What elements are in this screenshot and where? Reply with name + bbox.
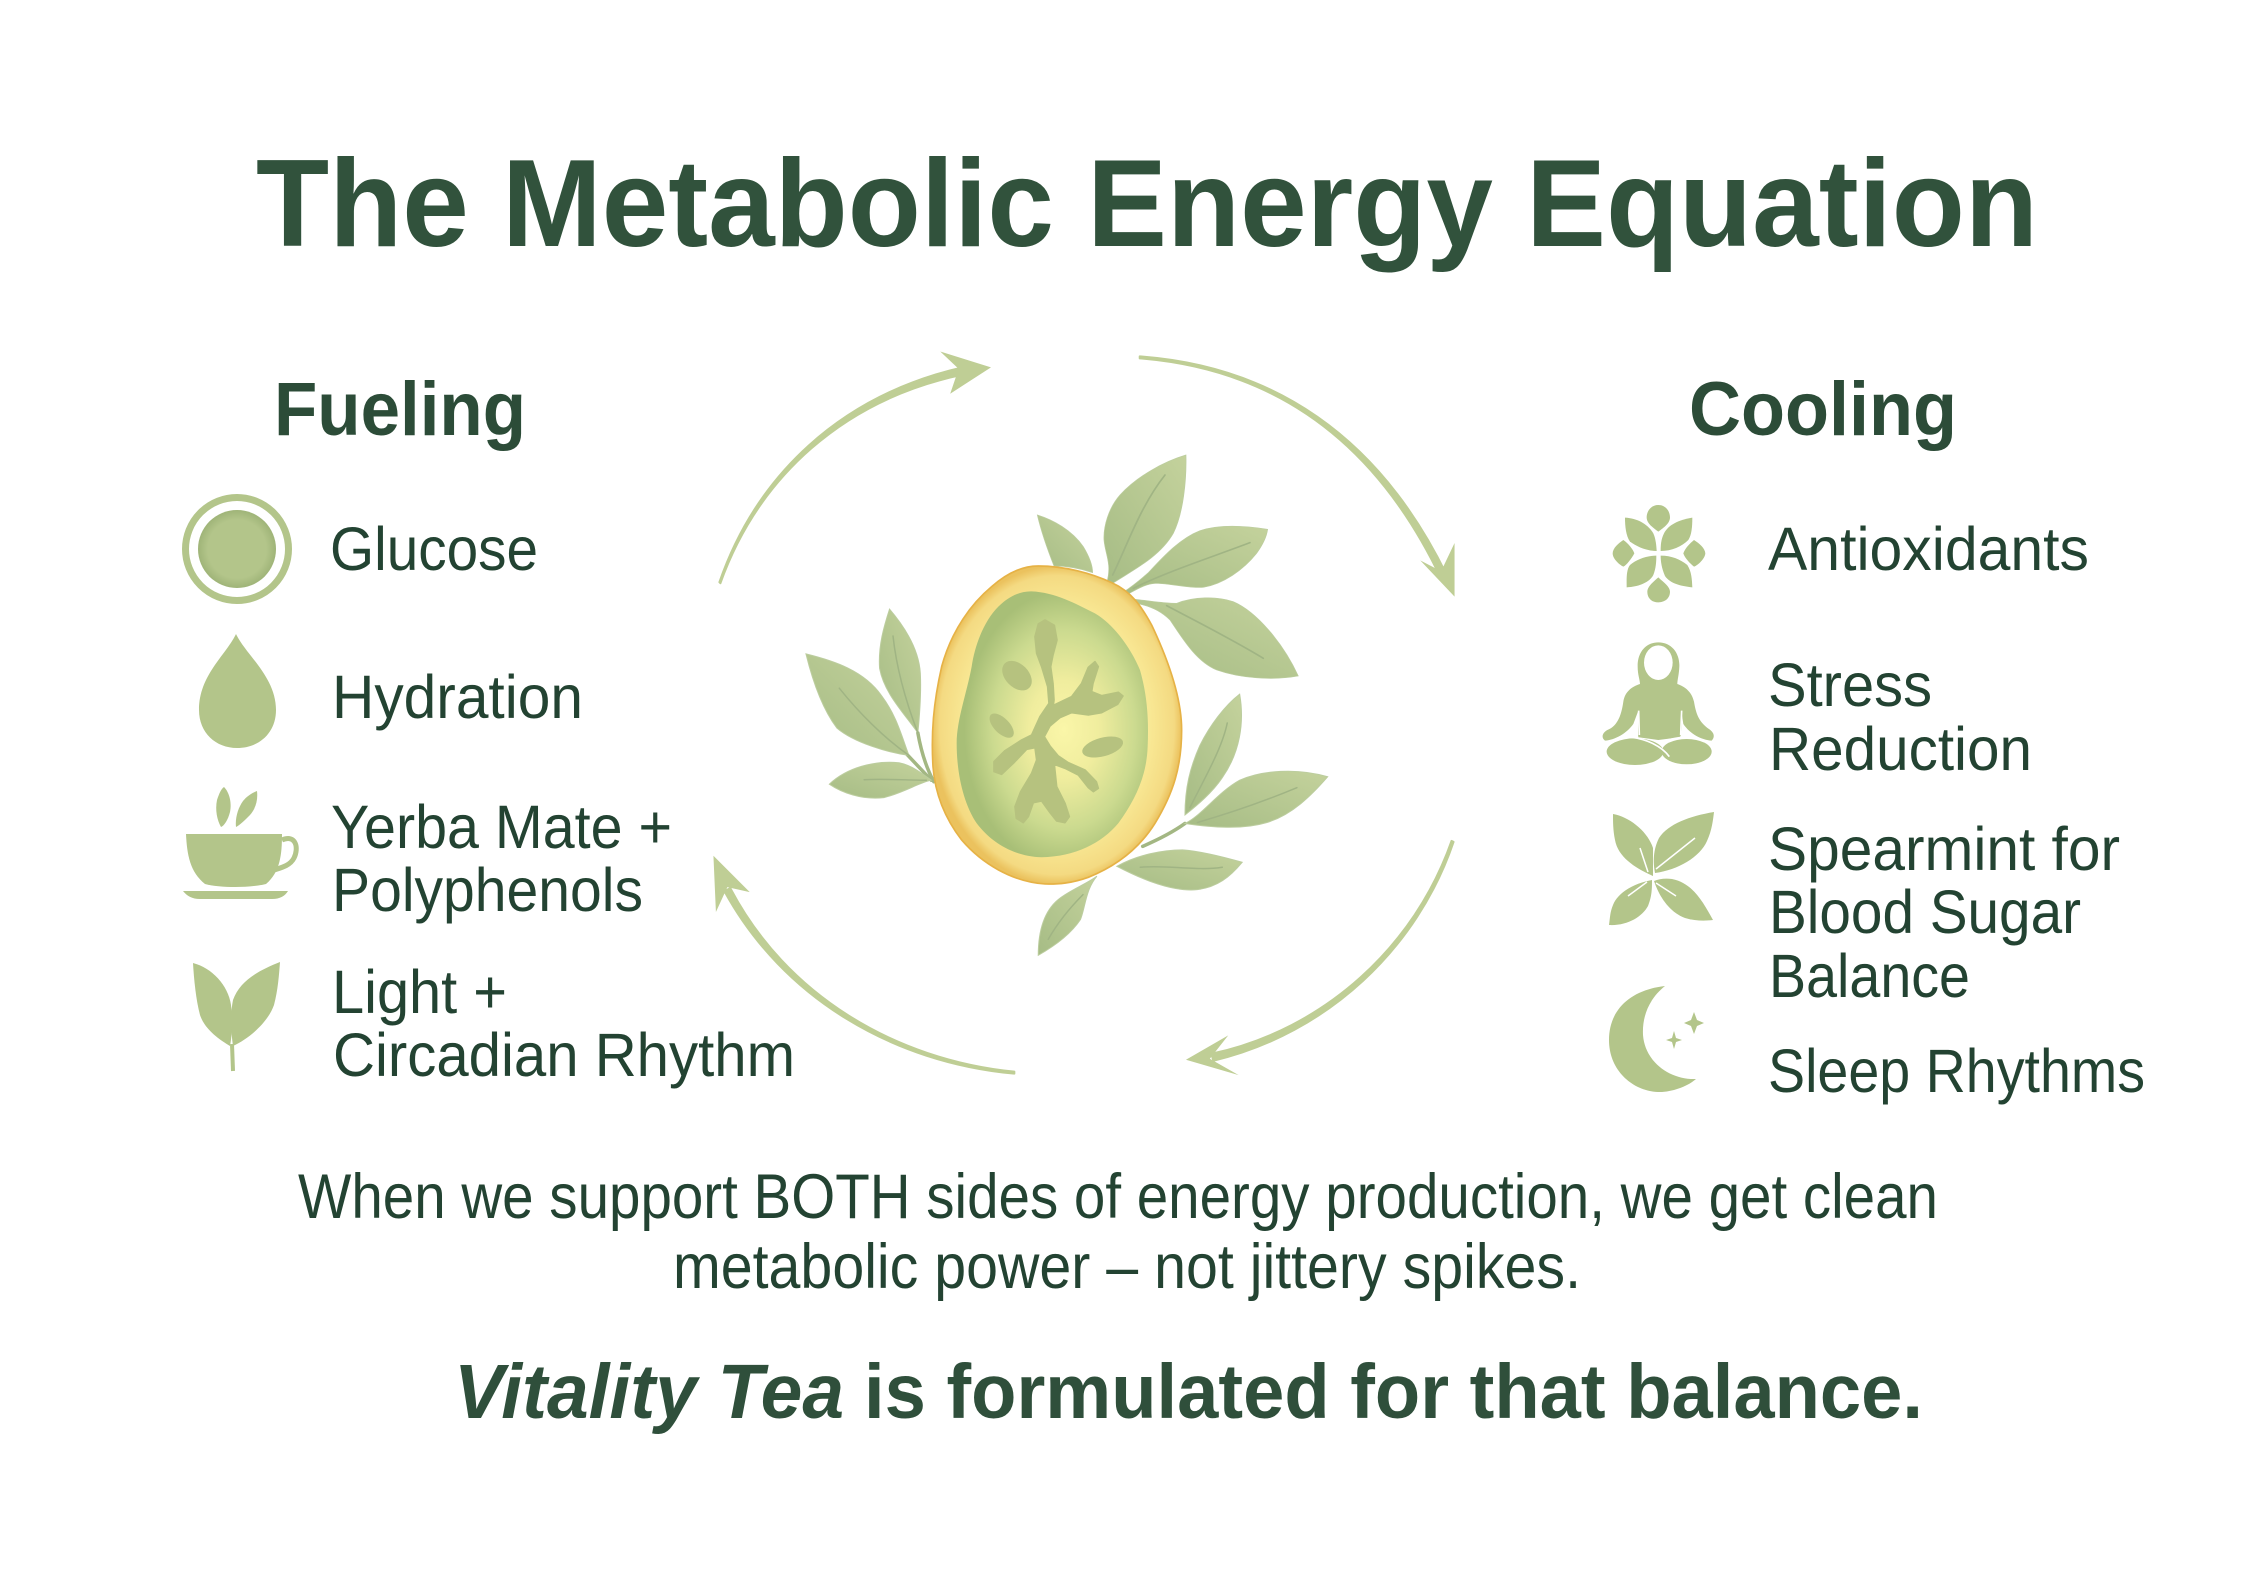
- text: Spearmint for Blood Sugar Balance: Blood Sugar: [1769, 878, 2081, 946]
- icon: antioxidant flower: [1613, 505, 1705, 602]
- arrow: upper left: [719, 351, 991, 583]
- text: Hydration: Hydration: [332, 663, 583, 731]
- text: Spearmint for Blood Sugar Balance: Balance: [1769, 942, 1970, 1010]
- arrow: lower left: [713, 856, 1014, 1074]
- text block: summary statement: [298, 1162, 1938, 1302]
- icon: spearmint leaves: [1609, 812, 1714, 925]
- fruit slice: [932, 566, 1182, 884]
- text: Spearmint for Blood Sugar Balance: Spearmint for: [1768, 815, 2120, 883]
- text: Light + Circadian Rhythm: Light +: [332, 958, 507, 1026]
- fruit: yellow rind: [932, 566, 1182, 884]
- text: Antioxidants: Antioxidants: [1768, 515, 2089, 583]
- text block: closing tagline: is formulated for that balance.: [864, 1349, 1923, 1435]
- text: Glucose: Glucose: [330, 515, 538, 583]
- panel: cooling: [1603, 367, 2145, 1105]
- icon: moon and stars: [1609, 986, 1704, 1092]
- text: Yerba Mate + Polyphenols: Yerba Mate +: [331, 793, 672, 861]
- text block: closing tagline: Vitality Tea: [454, 1349, 844, 1435]
- heading: Fueling: Fueling: [274, 367, 526, 452]
- text: Yerba Mate + Polyphenols: [331, 793, 672, 924]
- text: Stress Reduction: [1768, 651, 2032, 783]
- text block: summary statement: When we support BOTH sides of energy production, we get clean: [298, 1162, 1938, 1232]
- text: Light + Circadian Rhythm: Circadian Rhythm: [333, 1021, 795, 1089]
- text: Stress Reduction: Reduction: [1769, 715, 2032, 783]
- title: The Metabolic Energy Equation: [256, 135, 2038, 273]
- icon: glucose ring: [186, 498, 288, 600]
- fruit: green flesh: [957, 591, 1148, 857]
- text: Sleep Rhythms: Sleep Rhythms: [1768, 1037, 2145, 1105]
- leaves: left and bottom groups: [806, 609, 1328, 955]
- text: Stress Reduction: Stress: [1768, 651, 1932, 719]
- leaves: top group: [1037, 455, 1298, 678]
- panel: fueling: [183, 367, 795, 1089]
- fruit: branching pattern and seeds: [985, 620, 1125, 823]
- icon: water drop: [199, 634, 276, 748]
- icon: sprout: [193, 962, 280, 1071]
- text block: summary statement: metabolic power – not jittery spikes.: [673, 1232, 1581, 1302]
- heading: Cooling: Cooling: [1689, 367, 1957, 452]
- text: Light + Circadian Rhythm: [332, 958, 795, 1089]
- arrow: upper right: [1140, 356, 1455, 597]
- cycle diagram: [713, 351, 1455, 1075]
- text: Spearmint for Blood Sugar Balance: [1768, 815, 2120, 1010]
- arrow: lower right: [1186, 841, 1454, 1075]
- arrows: [713, 351, 1455, 1075]
- icon: meditating figure: [1603, 642, 1714, 765]
- text: Yerba Mate + Polyphenols: Polyphenols: [332, 856, 643, 924]
- icon: tea cup: [183, 787, 296, 899]
